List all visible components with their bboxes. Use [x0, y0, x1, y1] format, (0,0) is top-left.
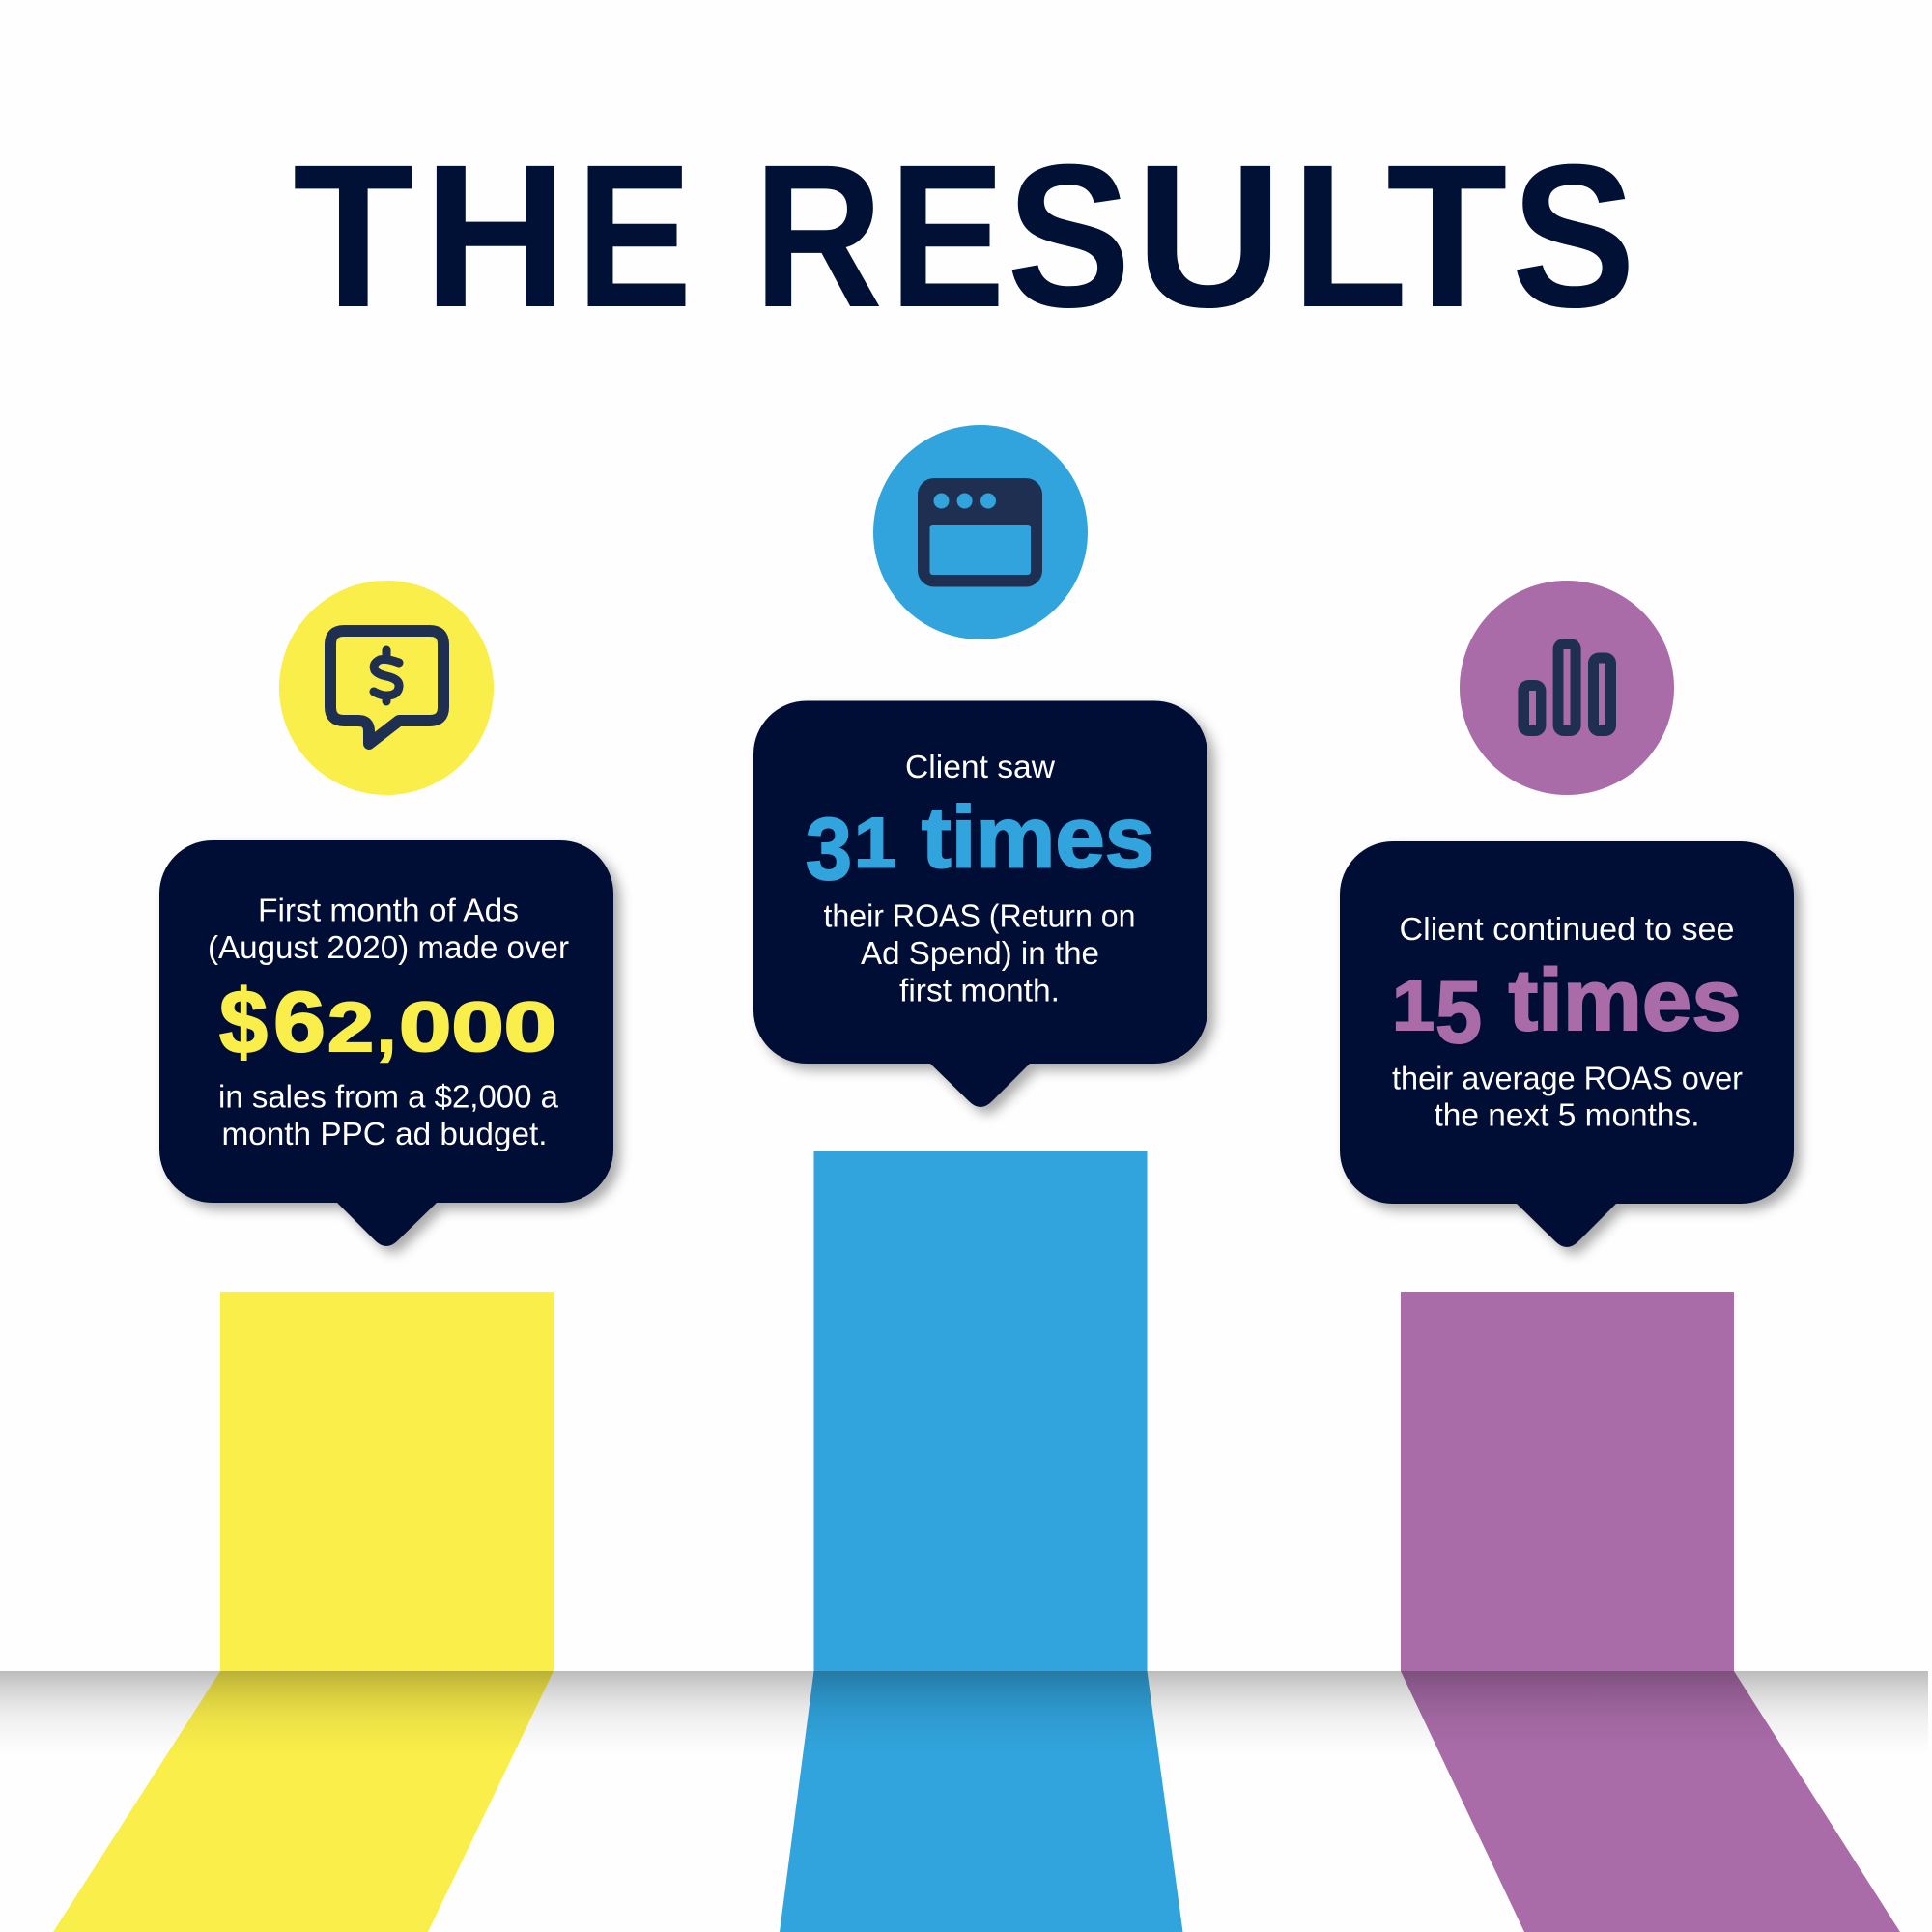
- icon circle: purple: [1460, 581, 1674, 795]
- icon circle: yellow: [279, 581, 494, 795]
- text: detail: [1392, 1061, 1743, 1132]
- title: T: [293, 122, 414, 350]
- text: big figure: 3: [806, 801, 852, 898]
- title: S: [1511, 122, 1635, 350]
- text: detail: first month.: [899, 972, 1060, 1009]
- text: detail: the next 5 months.: [1434, 1097, 1700, 1132]
- bar: yellow: [53, 1292, 554, 1932]
- title: H: [423, 122, 568, 350]
- text: intro: First month of Ads: [258, 893, 519, 927]
- icon circle: blue: [873, 425, 1088, 639]
- panel: first month sales: [159, 581, 613, 1246]
- text: big figure: 2: [327, 989, 374, 1066]
- callout bubble: [159, 840, 613, 1246]
- text: big figure: 5: [1435, 964, 1482, 1062]
- floor shadow: [0, 1671, 1928, 1754]
- text: big figure: times: [922, 790, 1154, 887]
- panel: next five months ROAS: [1340, 581, 1794, 1247]
- title: R: [753, 122, 883, 350]
- text: intro: (August 2020) made over: [208, 929, 569, 965]
- text: intro: Client continued to see: [1399, 911, 1735, 947]
- text: big figure: 1: [1392, 967, 1435, 1045]
- text: detail: in sales from a $2,000 a: [218, 1078, 559, 1115]
- text: detail: month PPC ad budget.: [222, 1116, 547, 1151]
- icon: chat bubble with dollar: [330, 631, 443, 744]
- icon: bar chart: [1518, 639, 1616, 736]
- text: intro: [208, 893, 569, 965]
- title: S: [1007, 122, 1131, 350]
- text: big figure: 1: [854, 804, 896, 883]
- text: detail: Ad Spend) in the: [861, 935, 1099, 971]
- text: detail: their average ROAS over: [1392, 1061, 1743, 1095]
- text: detail: [218, 1078, 559, 1151]
- text: intro: Client saw: [905, 749, 1055, 784]
- panel: first month ROAS: [753, 425, 1208, 1107]
- text: big figure: $: [219, 971, 268, 1072]
- bar: blue: [780, 1151, 1182, 1932]
- title: T: [1386, 122, 1508, 350]
- text: detail: their ROAS (Return on: [823, 898, 1136, 933]
- title: E: [889, 122, 1005, 350]
- text: detail: [823, 898, 1136, 1009]
- text: big figure: ,: [377, 989, 396, 1066]
- callout bubble: [753, 701, 1208, 1107]
- text: big figure: 000: [399, 989, 556, 1066]
- bar: purple: [1401, 1292, 1900, 1932]
- text: big figure: 6: [273, 974, 326, 1069]
- title: U: [1135, 122, 1283, 350]
- text: big figure: times: [1509, 952, 1741, 1049]
- icon: browser window: [918, 478, 1042, 587]
- callout bubble: [1340, 841, 1794, 1247]
- title: E: [576, 122, 692, 350]
- title: L: [1292, 122, 1407, 350]
